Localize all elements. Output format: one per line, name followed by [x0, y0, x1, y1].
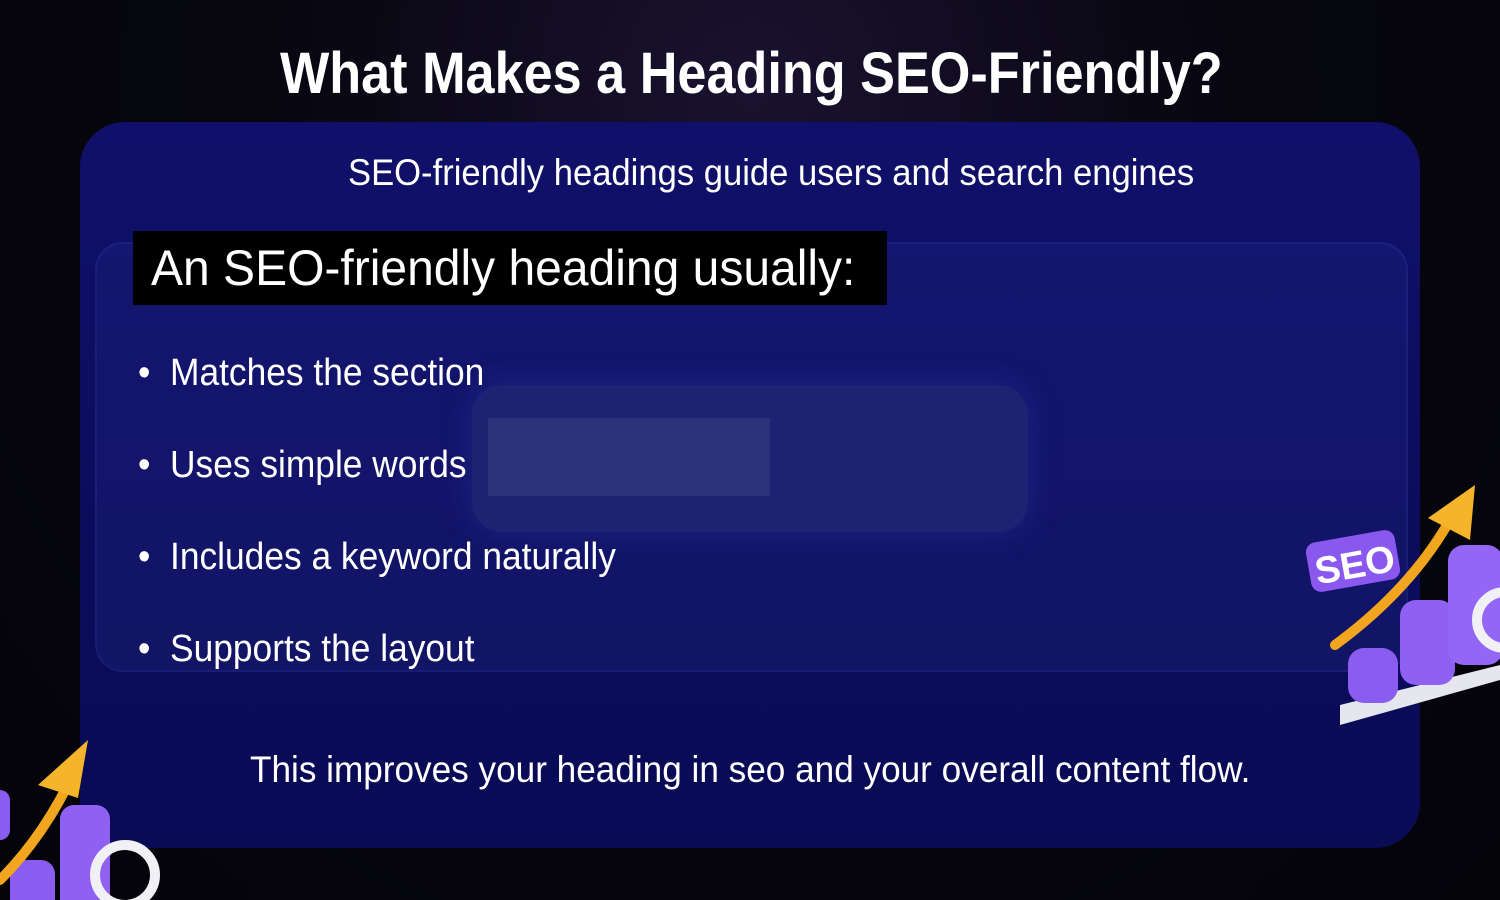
subtitle: SEO-friendly headings guide users and search engines [348, 152, 1194, 193]
bullet 2: • Uses simple words [138, 444, 467, 486]
bullet 4: • Supports the layout [138, 628, 475, 670]
bullet list [138, 352, 616, 670]
mockup inner bar [488, 418, 770, 496]
faint mockup window [95, 242, 1408, 672]
panel: main [80, 122, 1420, 848]
footer text: This improves your heading in seo and your overall content flow. [250, 749, 1250, 790]
title: What Makes a Heading SEO-Friendly? [280, 41, 1223, 106]
heading box [133, 231, 887, 305]
mockup highlight box [472, 385, 1028, 532]
icon: chart bottom left [0, 740, 160, 900]
heading text: An SEO-friendly heading usually: [151, 240, 855, 296]
bullet 3: • Includes a keyword naturally [138, 536, 616, 578]
icon: SEO chart right [1306, 485, 1500, 725]
bullet 1: • Matches the section [138, 352, 484, 394]
icon: SEO chart right: SEO [1312, 538, 1398, 593]
